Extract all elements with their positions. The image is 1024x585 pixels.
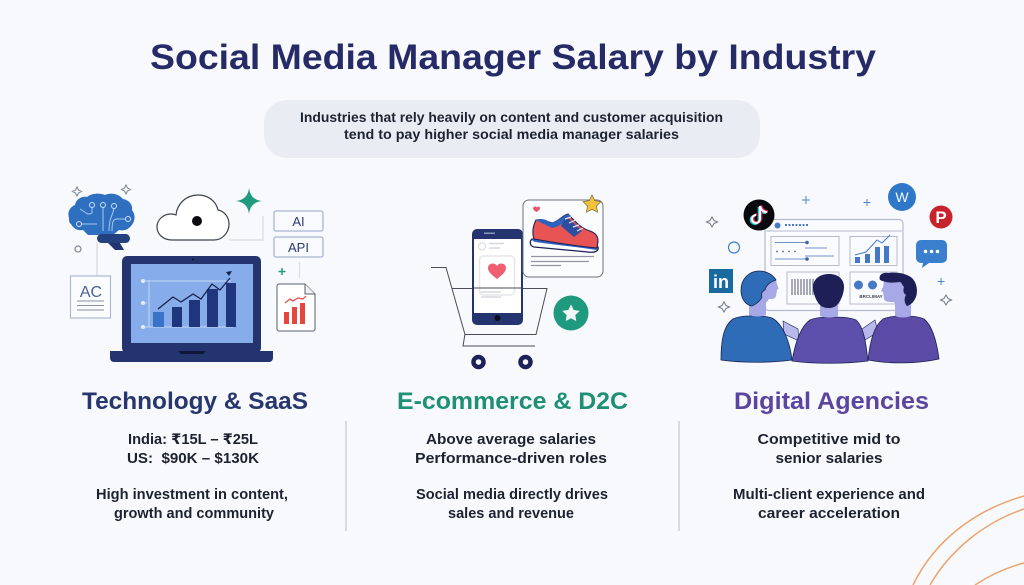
decorative corner arcs bbox=[913, 496, 1024, 585]
salary text: Multi-client experience and bbox=[733, 487, 925, 503]
heading: Technology & SaaS bbox=[82, 388, 308, 415]
column: Digital Agencies bbox=[733, 388, 929, 522]
icon: document AC bbox=[70, 276, 110, 318]
salary text: senior salaries bbox=[776, 451, 882, 467]
icon: green star badge bbox=[554, 296, 588, 330]
icon: brain bbox=[68, 194, 135, 250]
icon: chat bubble bbox=[916, 240, 947, 268]
heading: E-commerce & D2C bbox=[397, 388, 628, 415]
illustration: e-commerce bbox=[431, 195, 603, 367]
icon: shopping cart bbox=[431, 268, 547, 367]
bar chart bbox=[141, 271, 236, 329]
illustration: digital agencies bbox=[706, 183, 952, 363]
subtitle pill bbox=[264, 100, 760, 158]
salary text: US: $90K – $130K bbox=[127, 451, 260, 467]
label box: AI bbox=[274, 211, 323, 231]
panel: dashboard: BRCLIMAY bbox=[859, 294, 883, 299]
icon: Pinterest bbox=[930, 206, 952, 228]
icon: document AC: AC bbox=[80, 284, 102, 301]
column: E-commerce & D2C bbox=[397, 388, 628, 522]
icon: W badge bbox=[888, 183, 916, 211]
salary text: Performance-driven roles bbox=[415, 451, 607, 467]
icon: yellow star bbox=[583, 195, 601, 212]
column: Technology & SaaS bbox=[82, 388, 308, 522]
heading: Digital Agencies bbox=[734, 388, 929, 415]
icon: green sparkle bbox=[236, 188, 262, 214]
icon: LinkedIn: in bbox=[713, 272, 729, 292]
icon: refresh circle bbox=[728, 242, 740, 253]
salary text: Social media directly drives bbox=[416, 487, 608, 503]
salary text: Above average salaries bbox=[426, 432, 596, 448]
person: right bbox=[868, 273, 939, 363]
panel: dashboard bbox=[765, 220, 903, 310]
icon: laptop with chart bbox=[110, 256, 273, 362]
salary text: India: ₹15L – ₹25L bbox=[128, 432, 258, 448]
card: sneaker product bbox=[523, 200, 603, 277]
label box: API bbox=[274, 237, 323, 257]
icon: LinkedIn bbox=[709, 269, 733, 293]
salary text: sales and revenue bbox=[448, 506, 574, 522]
icon: sneaker bbox=[530, 214, 598, 252]
salary text: High investment in content, bbox=[96, 487, 288, 503]
icon: W badge: W bbox=[895, 189, 909, 205]
sparkles and plus signs bbox=[706, 196, 952, 312]
salary text bbox=[733, 432, 925, 522]
salary text bbox=[415, 432, 608, 522]
subtitle pill: Industries that rely heavily on content and customer acquisition bbox=[300, 109, 723, 125]
person: left bbox=[721, 271, 792, 362]
barcode graphic bbox=[792, 279, 813, 295]
salary text bbox=[96, 432, 288, 522]
subtitle pill: tend to pay higher social media manager salaries bbox=[344, 126, 679, 142]
salary text: career acceleration bbox=[758, 506, 900, 522]
icon: phone with heart bbox=[472, 229, 523, 325]
icon: cloud bbox=[157, 195, 229, 240]
tablets held by the team bbox=[783, 320, 878, 341]
illustration: technology bbox=[68, 185, 323, 362]
icon: TikTok bbox=[744, 200, 774, 230]
title: Social Media Manager Salary by Industry bbox=[150, 38, 877, 77]
salary text: growth and community bbox=[114, 506, 274, 522]
icon: red report document bbox=[277, 284, 315, 331]
label box: API: API bbox=[288, 240, 309, 255]
icon: Pinterest: P bbox=[935, 208, 947, 227]
salary text: Competitive mid to bbox=[758, 432, 901, 448]
person: centre bbox=[792, 274, 868, 363]
label box: AI: AI bbox=[292, 214, 305, 229]
